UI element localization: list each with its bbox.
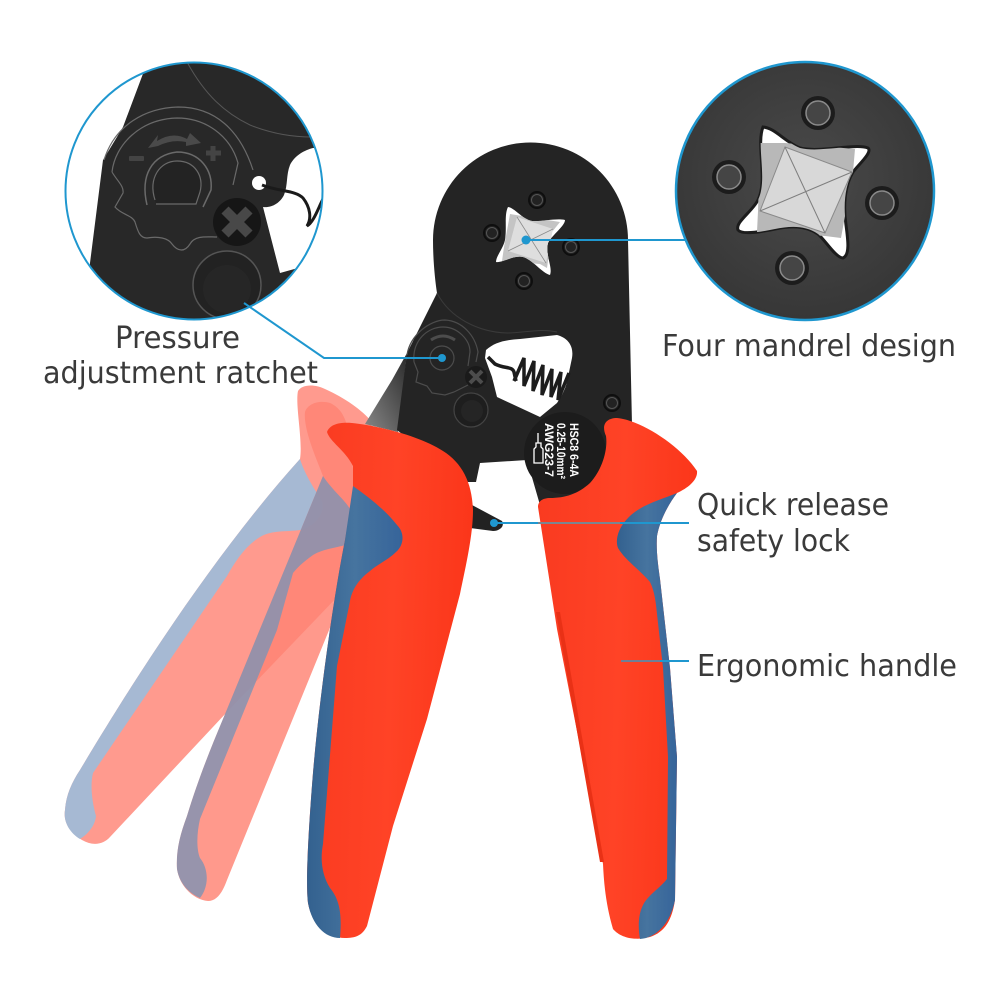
tool body: head and frame <box>365 143 632 505</box>
detail circle: four mandrel design <box>676 62 934 320</box>
badge text <box>542 423 581 479</box>
spring <box>488 357 569 400</box>
plus mark <box>206 146 221 161</box>
callout line: ergonomic handle <box>621 660 689 662</box>
jaw window opening <box>485 335 572 417</box>
direction arrow <box>148 133 201 148</box>
ghost handle: middle position <box>177 402 353 901</box>
label: ergonomic handle: Ergonomic handle <box>697 649 957 684</box>
badge text: HSC8 6-4A <box>567 423 581 477</box>
label: four mandrel design: Four mandrel design <box>662 329 956 364</box>
label: pressure adjustment ratchet: Pressure <box>115 321 240 356</box>
callout line: ratchet to detail circle <box>244 303 446 362</box>
ferrule icon <box>534 433 543 463</box>
ratchet wheel on tool <box>407 320 478 395</box>
quick release latch <box>470 505 503 531</box>
badge text: 0.25-10mm² <box>554 423 568 479</box>
release button <box>454 393 488 427</box>
crimping die: four mandrels <box>484 192 620 411</box>
label: pressure adjustment ratchet <box>43 321 318 391</box>
die star <box>738 127 869 258</box>
screw <box>465 366 487 388</box>
detail circle: pressure adjustment ratchet <box>64 62 324 320</box>
model badge <box>524 412 606 494</box>
label: quick release safety lock: safety lock <box>697 524 851 559</box>
right handle <box>538 418 697 939</box>
mandrel pin holes <box>712 96 899 285</box>
ghost handle: far position <box>65 385 372 844</box>
cross screw <box>213 198 261 246</box>
spring wire <box>252 176 266 190</box>
label: pressure adjustment ratchet: adjustment ratchet <box>43 356 318 391</box>
badge text: AWG23-7 <box>542 423 556 477</box>
callout line: safety lock <box>490 519 689 527</box>
callout line: head to mandrel circle <box>522 236 686 244</box>
left handle <box>307 423 473 938</box>
round button <box>193 251 261 319</box>
label: quick release safety lock <box>697 488 889 559</box>
minus mark <box>129 156 144 161</box>
ratchet wheel outline <box>104 107 253 250</box>
label: quick release safety lock: Quick release <box>697 488 889 523</box>
